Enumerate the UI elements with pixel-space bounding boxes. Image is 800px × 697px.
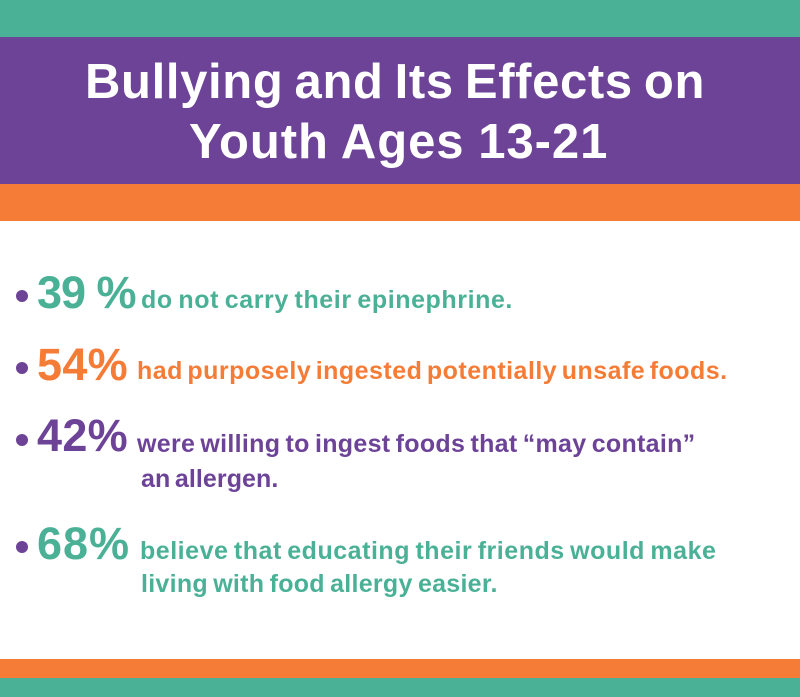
stat: 42 percent: were willing to ingest foods that “may contain” [137, 430, 696, 458]
bottom orange band [0, 659, 800, 678]
stat: 42 percent [16, 410, 696, 493]
stat: 39 percent: 39 % [37, 267, 136, 318]
stat: 39 percent [16, 267, 513, 318]
bottom teal band [0, 678, 800, 697]
top teal band [0, 0, 800, 37]
stat: 54 percent: had purposely ingested potentially unsafe foods. [137, 357, 728, 385]
stat: 68 percent: believe that educating their friends would make [140, 537, 716, 565]
stat: 68 percent: 68% [37, 518, 130, 569]
title: Bullying and Its Effects on [85, 55, 705, 109]
stat: 39 percent: do not carry their epinephrine. [141, 286, 513, 314]
stat: 42 percent: 42% [37, 410, 128, 461]
title panel [0, 37, 800, 184]
stat: 68 percent [16, 518, 716, 598]
stat: 42 percent: an allergen. [141, 465, 278, 493]
stat: 54 percent: 54% [37, 339, 128, 390]
stat: 68 percent: living with food allergy easier. [141, 570, 498, 598]
top orange band [0, 184, 800, 221]
title [85, 55, 705, 169]
stat: 54 percent [16, 339, 728, 390]
title: Youth Ages 13-21 [189, 115, 608, 169]
